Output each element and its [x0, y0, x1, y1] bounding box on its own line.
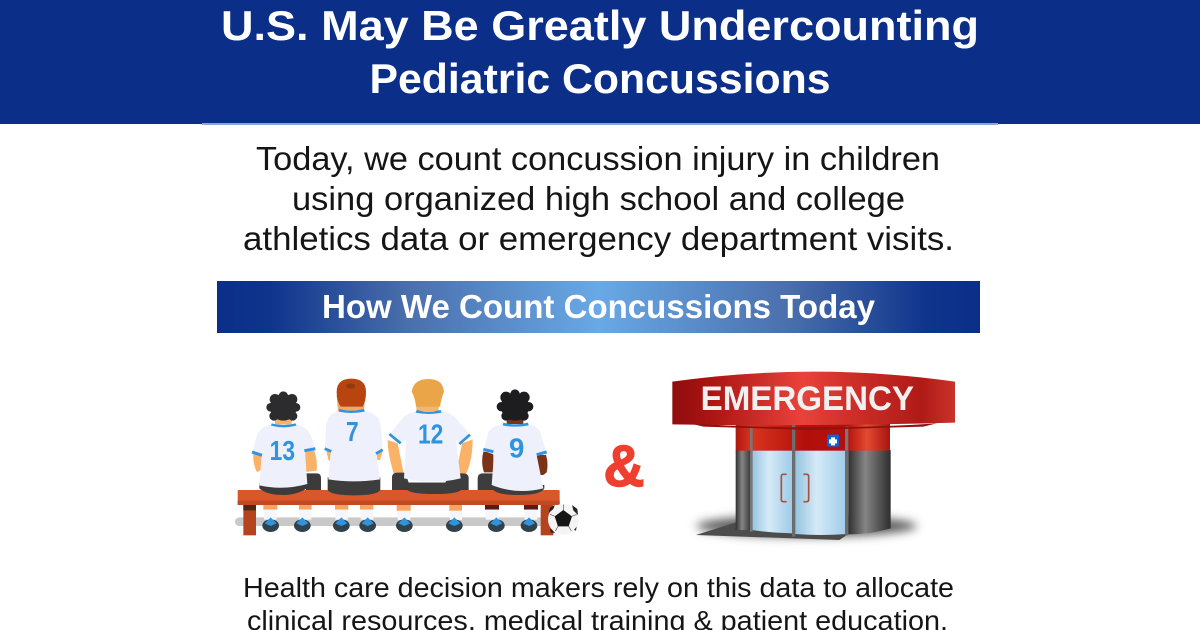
soccer ball: [548, 504, 579, 535]
floor: [696, 522, 846, 540]
floor shadow: [235, 517, 555, 526]
emergency sign: [672, 372, 955, 430]
player 9: 9: [509, 432, 524, 463]
player 12: 12: [418, 418, 443, 449]
player 12: [388, 379, 473, 494]
intro text: using organized high school and college: [292, 180, 905, 217]
glass doors: [750, 423, 848, 537]
player 9: [478, 389, 548, 495]
title: Pediatric Concussions: [370, 55, 830, 102]
section heading bar: [217, 281, 980, 333]
closing text: [243, 572, 954, 630]
player 7: [325, 379, 383, 495]
intro text: [243, 140, 954, 257]
red door header: [736, 422, 890, 451]
legs and shoes: [262, 505, 538, 532]
player 13: 13: [270, 435, 295, 466]
title banner: [0, 0, 1200, 125]
intro text: athletics data or emergency department visits.: [243, 220, 954, 257]
emergency sign: EMERGENCY: [701, 380, 914, 418]
ampersand: &: [604, 434, 644, 499]
bench: [238, 490, 560, 535]
closing text: Health care decision makers rely on this data to allocate: [243, 572, 954, 603]
illustration: emergency department entrance: [672, 372, 955, 540]
player 7: 7: [346, 416, 359, 447]
title: [221, 2, 979, 102]
side columns: [736, 450, 891, 534]
illustration: players on a bench: [235, 379, 579, 535]
player 13: [252, 391, 321, 495]
section heading: How We Count Concussions Today: [322, 288, 876, 325]
ground shadow: [697, 515, 917, 537]
title: U.S. May Be Greatly Undercounting: [221, 2, 979, 49]
intro text: Today, we count concussion injury in children: [256, 140, 940, 177]
